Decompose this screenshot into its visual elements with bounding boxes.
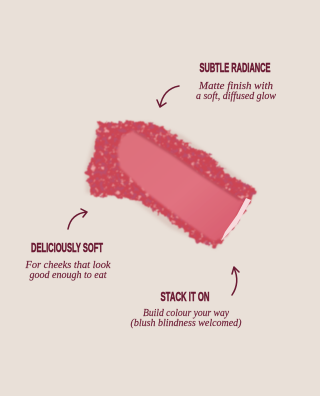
text: deliciously soft description: good enough to eat (30, 269, 107, 281)
text: stack it on description: (blush blindness welcomed) (130, 317, 242, 329)
text: subtle radiance description: Matte finish with (198, 80, 273, 92)
arrow: stack it on (232, 267, 239, 295)
arrow: deliciously soft (68, 209, 87, 229)
text: stack it on description (130, 307, 242, 329)
text: subtle radiance description (196, 80, 277, 102)
text: stack it on description: Build colour your way (143, 307, 229, 319)
text: subtle radiance description: a soft, diffused glow (196, 90, 277, 102)
crumbled powder edge (85, 122, 257, 247)
shaded upper rim of face (134, 131, 240, 200)
scraped white edge (221, 198, 251, 241)
text: deliciously soft description: For cheeks that look (25, 259, 112, 271)
blush powder swatch (85, 122, 257, 249)
arrow: subtle radiance (157, 86, 179, 107)
heading: deliciously soft: DELICIOUSLY SOFT (31, 240, 103, 255)
pressed powder face (117, 130, 243, 241)
heading: stack it on: STACK IT ON (160, 289, 210, 304)
powder shadow (85, 122, 257, 249)
text: deliciously soft description (25, 259, 112, 281)
